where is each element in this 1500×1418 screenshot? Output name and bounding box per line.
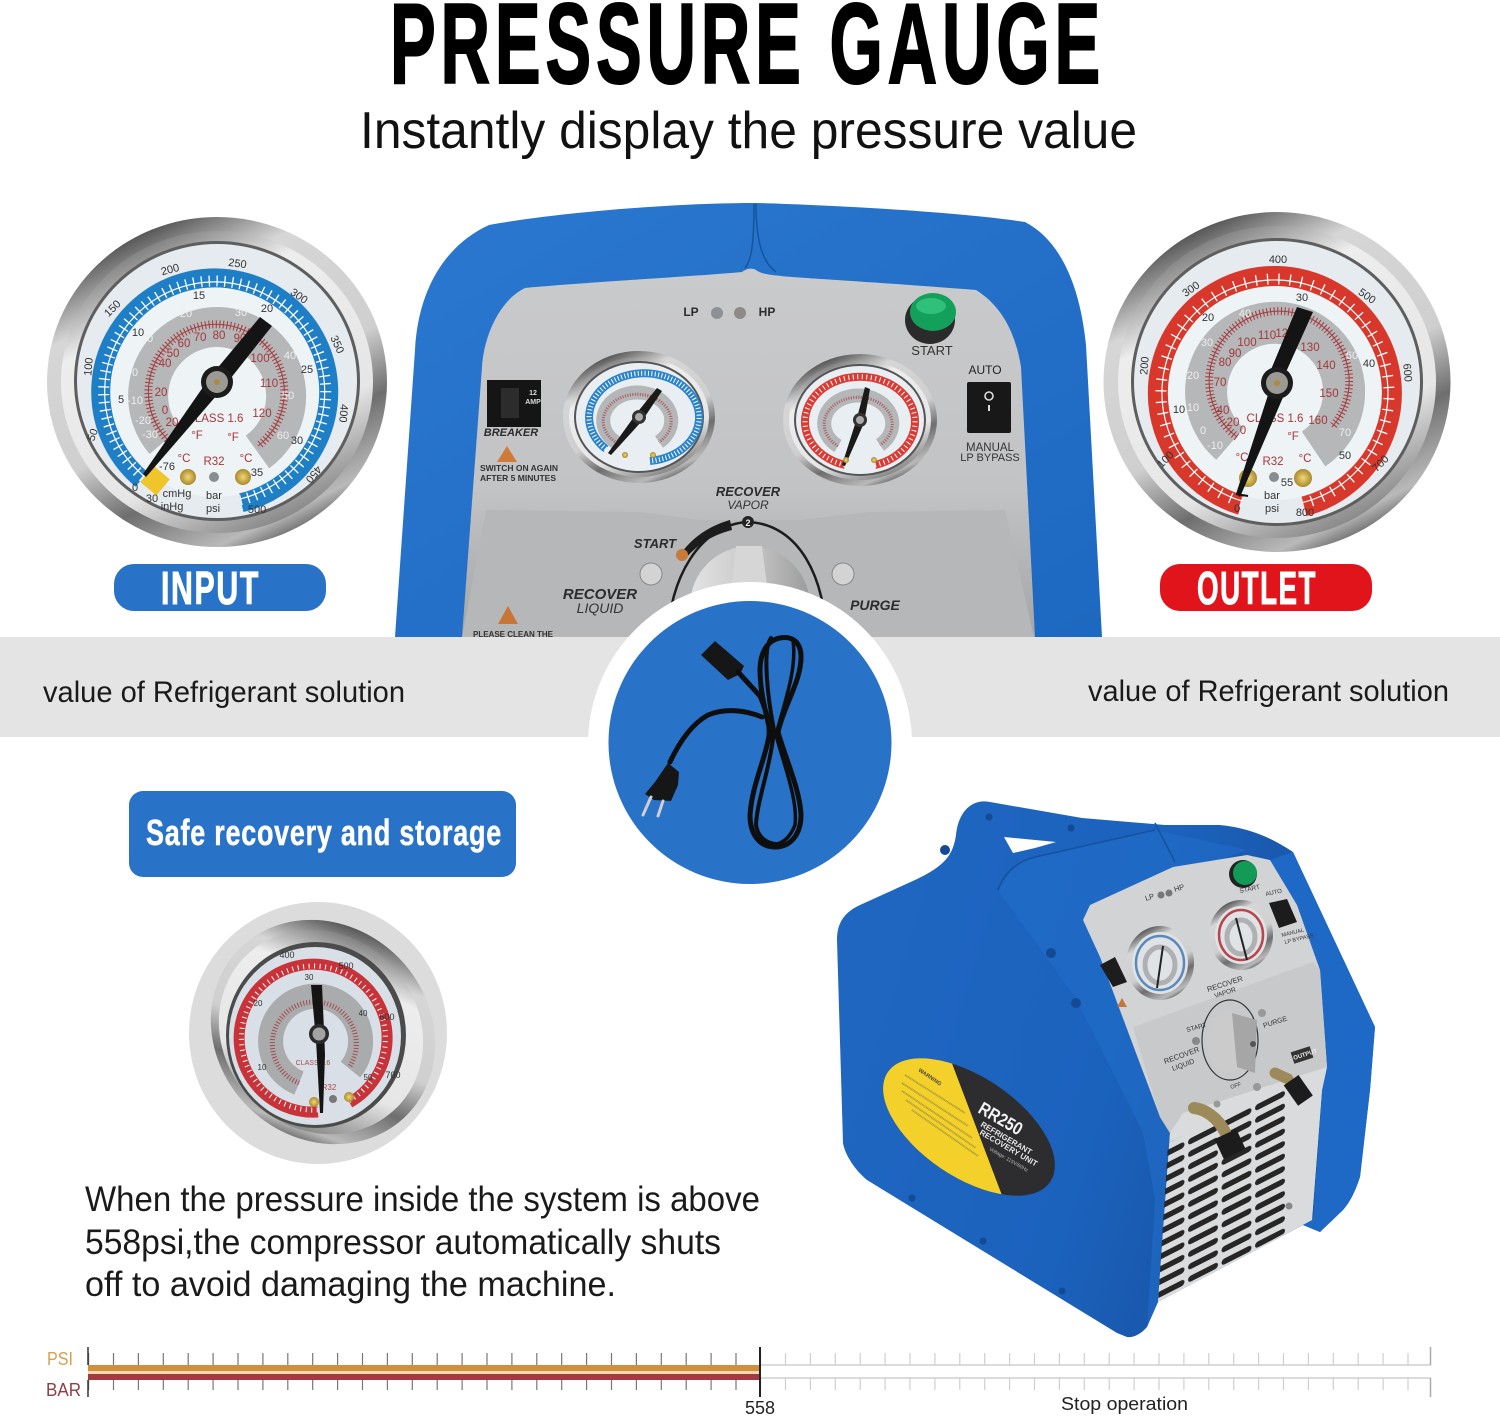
scale numbers: °C: [1299, 453, 1311, 465]
scale numbers: 0: [1240, 425, 1246, 437]
selector dial: PLEASE CLEAN THE: [473, 630, 554, 639]
scale numbers: -76: [159, 461, 175, 473]
scale numbers: 150: [102, 298, 124, 320]
scale numbers: 600: [1400, 363, 1414, 382]
LP HP indicators: [683, 305, 775, 319]
scale numbers: °F: [227, 432, 239, 444]
scale numbers: 5: [118, 394, 124, 406]
caption right: value of Refrigerant solution: [1088, 675, 1449, 708]
scale numbers: 100: [1237, 337, 1257, 349]
scale numbers: 160: [1308, 415, 1328, 427]
scale numbers: 100: [82, 357, 96, 376]
scale numbers: bar: [206, 490, 222, 502]
warning label: WARNING: [917, 1068, 942, 1088]
scale numbers: 80: [1219, 357, 1231, 369]
scale numbers: 0: [1234, 503, 1240, 515]
needle: [1236, 307, 1313, 497]
blue body: [837, 801, 1375, 1337]
scale numbers: [1138, 254, 1414, 519]
auto manual rocker switch: MANUAL: [966, 442, 1015, 454]
scale numbers: -10: [1207, 440, 1223, 452]
scale numbers: 500: [248, 504, 266, 516]
selector dial: START: [634, 536, 677, 551]
handle opening: [1004, 837, 1056, 853]
red pressure scale: [1158, 276, 1392, 506]
stop operation label: Stop operation: [1061, 1394, 1188, 1414]
warning label: RR250: [975, 1098, 1026, 1140]
warning label: [883, 1058, 1055, 1196]
breaker switch: AMP: [525, 399, 541, 406]
scale numbers: 140: [1316, 360, 1336, 372]
scale numbers: 20: [1227, 417, 1239, 429]
gauge: high pressure close-up: [165, 874, 481, 1190]
gauge: outlet (red): [1104, 212, 1450, 552]
silver faceplate: [462, 269, 1035, 637]
lower plate fold: [1133, 962, 1327, 1133]
scale numbers: 0: [132, 482, 138, 494]
front panel controls: [1229, 860, 1257, 888]
scale numbers: CLASS 1.6: [296, 1060, 330, 1067]
scale numbers: 350: [327, 334, 346, 356]
scale numbers: 20: [254, 999, 263, 1008]
scale numbers: 500: [1356, 286, 1378, 307]
scale numbers: 700: [1370, 453, 1392, 475]
scale numbers: 300: [1180, 279, 1202, 300]
scale numbers: 40: [284, 350, 296, 362]
selector dial: LIQUID: [577, 600, 623, 616]
scale numbers: inHg: [161, 501, 183, 513]
scale numbers: 10: [141, 333, 153, 345]
scale numbers: 35: [251, 467, 263, 479]
scale numbers: 250: [227, 257, 247, 271]
power cord badge: [588, 582, 912, 906]
value 558: 558: [745, 1398, 775, 1418]
scale numbers: 120: [252, 408, 272, 420]
scale numbers: 55: [1281, 477, 1293, 489]
scale numbers: 30: [1201, 337, 1213, 349]
gauge: input (blue): [47, 217, 387, 547]
red scale: [239, 964, 387, 1112]
scale numbers: 30: [146, 493, 158, 505]
auto manual rocker switch: AUTO: [968, 363, 1002, 377]
breaker switch: 12: [529, 390, 537, 397]
scale numbers: 80: [213, 330, 225, 342]
scale numbers: 50: [85, 427, 101, 443]
scale numbers: 100: [1155, 449, 1177, 471]
scale numbers: 300: [288, 286, 310, 307]
heading: safe recovery and storage: Safe recovery and storage: [146, 812, 502, 853]
scale numbers: 40: [359, 1009, 368, 1018]
scale numbers: 10: [1187, 402, 1199, 414]
icon: power cord: [643, 638, 801, 847]
scale numbers: 25: [301, 364, 313, 376]
selector dial: [473, 484, 901, 666]
breaker switch: [480, 380, 558, 483]
scale numbers: [254, 950, 401, 1092]
selector dial: VAPOR: [727, 498, 769, 512]
scale numbers: 200: [160, 262, 181, 278]
scale numbers: 400: [279, 950, 295, 960]
gray band: [271, 996, 361, 1083]
front blue gauge: [1126, 926, 1194, 1000]
yellow zero tag: [140, 466, 170, 495]
scale numbers: 50: [282, 390, 294, 402]
vent grille: [1158, 1084, 1287, 1302]
scale numbers: 50: [167, 348, 179, 360]
hood seam: [998, 823, 1175, 890]
start button: START: [911, 343, 953, 358]
scale numbers: 200: [1138, 356, 1152, 375]
scale numbers: 50: [364, 1073, 373, 1082]
product: recovery machine: AUTO: [1265, 889, 1283, 898]
product: recovery machine: VAPOR: [1213, 986, 1237, 1000]
scale numbers: CLASS 1.6: [187, 413, 243, 425]
scale numbers: 500: [338, 961, 354, 971]
scale numbers: 20: [166, 417, 178, 429]
heading: safe recovery and storage: [129, 791, 516, 877]
product: recovery machine: RECOVER: [1206, 974, 1244, 994]
LP HP indicators: LP: [683, 305, 699, 319]
product: recovery machine: LIQUID: [1171, 1058, 1196, 1073]
scale numbers: °F: [191, 430, 203, 442]
scale numbers: R32: [322, 1083, 337, 1092]
scale numbers: 800: [1296, 507, 1314, 519]
scale numbers: bar: [1264, 490, 1280, 502]
caption left: value of Refrigerant solution: [43, 676, 405, 709]
scale numbers: °C: [240, 453, 252, 465]
scale numbers: 400: [336, 404, 350, 423]
scale numbers: 10: [258, 1063, 267, 1072]
warning label: Voltage: 115V/60Hz: [988, 1147, 1029, 1174]
side screw holes: [940, 845, 950, 855]
scale numbers: 120: [1275, 328, 1295, 340]
scale numbers: 450: [303, 463, 324, 485]
scale numbers: 30: [1296, 292, 1308, 304]
scale bar: PSI and BAR: BAR: [46, 1380, 81, 1400]
text block: pressure cutoff: off to avoid damaging the machine.: [85, 1265, 616, 1304]
blue housing: [395, 203, 1102, 637]
scale numbers: 50: [1339, 450, 1351, 462]
scale numbers: 70: [194, 332, 206, 344]
selector dial: 2: [745, 518, 751, 528]
scale numbers: 40: [159, 358, 171, 370]
scale numbers: 60: [1346, 350, 1358, 362]
scale numbers: 20: [155, 387, 167, 399]
output tag: [1291, 1046, 1313, 1064]
scale numbers: 110: [260, 378, 278, 390]
blue pressure scale: [101, 278, 329, 503]
scale numbers: °C: [178, 453, 190, 465]
text block: pressure cutoff: 558psi,the compressor automatically shuts: [85, 1223, 721, 1262]
scale numbers: 100: [250, 353, 270, 365]
auto manual rocker switch: [960, 363, 1020, 464]
text block: pressure cutoff: [85, 1180, 760, 1304]
label: outlet pill: OUTLET: [1197, 562, 1317, 614]
metal chassis: [1083, 855, 1327, 1302]
inactive range: [760, 1347, 1431, 1397]
scale numbers: 130: [1300, 342, 1320, 354]
scale numbers: 20: [261, 303, 273, 315]
scale numbers: -20: [135, 415, 151, 427]
product: recovery machine: OFF: [1230, 1082, 1243, 1091]
scale numbers: 400: [1269, 254, 1287, 266]
scale numbers: [82, 257, 350, 516]
product: recovery machine: [837, 801, 1375, 1337]
scale numbers: R32: [203, 456, 225, 468]
breaker switch: BREAKER: [484, 427, 538, 439]
scale numbers: 110: [1258, 330, 1276, 342]
front rim highlight: [998, 830, 1247, 1327]
scale numbers: R32: [1262, 456, 1284, 468]
gray temperature band: [1206, 323, 1344, 449]
small red gauge: [783, 354, 937, 486]
scale numbers: 0: [162, 405, 168, 417]
scale numbers: °F: [1287, 431, 1299, 443]
scale numbers: 20: [180, 308, 192, 320]
unit labels: PSI: [47, 1349, 73, 1369]
scale numbers: -10: [127, 395, 143, 407]
scale numbers: 0: [1200, 425, 1206, 437]
label: input pill: INPUT: [161, 562, 260, 614]
scale numbers: 70: [1214, 377, 1226, 389]
gray temperature band: [148, 327, 286, 452]
breaker switch: AFTER 5 MINUTES: [480, 473, 556, 483]
warning label: REFRIGERANT: [979, 1120, 1034, 1157]
needle: [311, 985, 325, 1113]
scale numbers: psi: [1265, 503, 1279, 515]
product: recovery machine: START: [1186, 1022, 1208, 1034]
scale numbers: 40: [1239, 308, 1251, 320]
scale bar: PSI and BAR: [46, 1347, 1431, 1418]
screws: [309, 1097, 319, 1107]
product: recovery machine: LP BYPASS: [1284, 933, 1315, 946]
LP HP indicators: HP: [759, 305, 775, 319]
small blue gauge: [563, 351, 715, 483]
scale numbers: 10: [132, 327, 144, 339]
product: recovery machine: OUTPUT: [1293, 1048, 1318, 1062]
scale numbers: 150: [1319, 388, 1339, 400]
warning label: RECOVERY UNIT: [978, 1128, 1039, 1168]
scale numbers: 30: [235, 307, 247, 319]
scale numbers: 40: [1217, 405, 1229, 417]
subtitle: Instantly display the pressure value: [360, 102, 1137, 160]
gray caption band: [0, 637, 1500, 737]
scale numbers: cmHg: [163, 488, 191, 500]
scale numbers: psi: [206, 503, 220, 515]
scale numbers: 0: [132, 367, 138, 379]
scale numbers: -30: [142, 429, 158, 441]
breaker switch: SWITCH ON AGAIN: [480, 463, 558, 473]
needle: [143, 317, 272, 477]
scale numbers: 30: [305, 973, 314, 982]
breaker and rocker: [1100, 957, 1127, 987]
product: recovery machine: MANUAL: [1281, 928, 1305, 939]
scale numbers: 90: [1229, 348, 1241, 360]
right rim shade: [1270, 852, 1375, 1232]
product: recovery machine: RECOVER: [1163, 1045, 1201, 1066]
scale numbers: 20: [1202, 312, 1214, 324]
scale numbers: 700: [385, 1070, 401, 1080]
panel: recovery machine control panel close-up: [395, 203, 1102, 666]
selector dial: RECOVER: [716, 484, 781, 499]
front red gauge: [1209, 900, 1273, 970]
product: recovery machine: LP: [1144, 892, 1155, 903]
selector dial: RECOVER: [563, 586, 637, 603]
scale numbers: 40: [1363, 358, 1375, 370]
scale numbers: 20: [1187, 370, 1199, 382]
scale numbers: 15: [193, 290, 205, 302]
scale numbers: 10: [1173, 404, 1185, 416]
active range: [88, 1347, 760, 1397]
product: recovery machine: START: [1239, 884, 1261, 895]
calibration screws: [1239, 469, 1257, 487]
product: recovery machine: PURGE: [1262, 1015, 1289, 1030]
scale numbers: °C: [1236, 452, 1248, 464]
scale numbers: 90: [234, 333, 246, 345]
calibration screws: [180, 469, 196, 485]
product: recovery machine: HP: [1173, 882, 1186, 894]
scale numbers: 60: [178, 338, 190, 350]
text block: pressure cutoff: When the pressure inside the system is above: [85, 1180, 760, 1219]
scale numbers: 600: [379, 1012, 395, 1022]
selector dial: PURGE: [850, 597, 901, 613]
scale numbers: 30: [291, 435, 303, 447]
auto manual rocker switch: LP BYPASS: [960, 452, 1020, 464]
scale numbers: CLASS 1.6: [1247, 413, 1303, 425]
selector knob: [1202, 1000, 1258, 1080]
scale numbers: 70: [1339, 427, 1351, 439]
scale numbers: 60: [277, 430, 289, 442]
start button: [905, 293, 956, 358]
brass fittings: [1194, 1108, 1225, 1132]
